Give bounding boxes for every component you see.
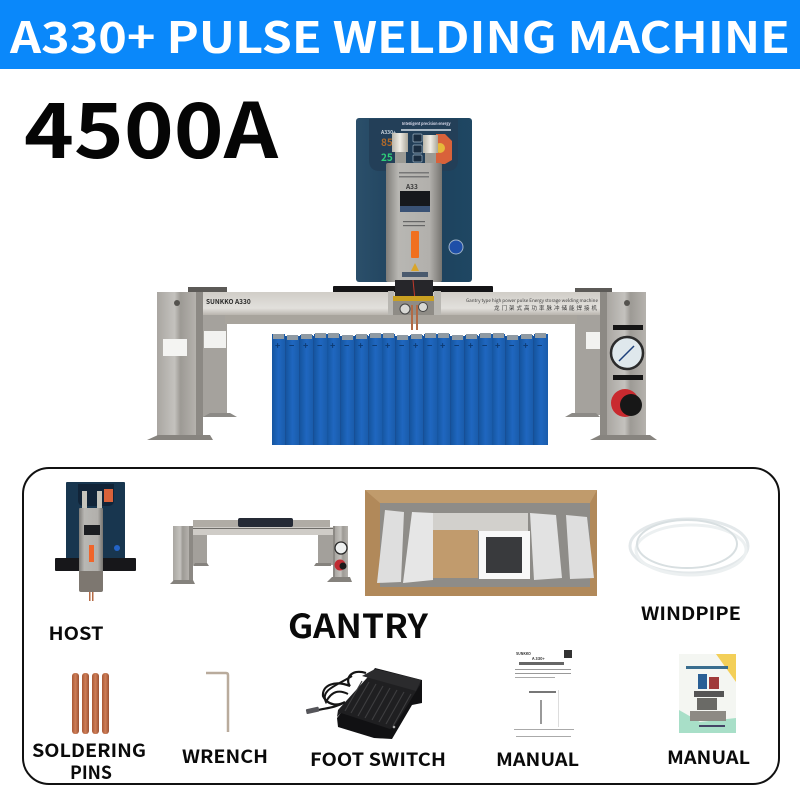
label: manual two: MANUAL <box>667 744 750 770</box>
battery pack: twenty blue cells: − <box>372 339 377 352</box>
label: host: HOST <box>48 620 104 646</box>
heading: current rating: 4500A <box>24 70 279 180</box>
label: wrench: WRENCH <box>182 743 268 769</box>
battery pack: twenty blue cells: + <box>303 339 308 352</box>
host unit <box>356 118 472 282</box>
host unit: A330+ <box>380 129 396 136</box>
gantry beam <box>197 292 607 324</box>
host unit: 85 <box>381 134 393 149</box>
battery pack: twenty blue cells: + <box>523 339 528 352</box>
battery pack: twenty blue cells <box>272 333 548 445</box>
label: soldering pins: SOLDERING <box>32 737 146 763</box>
battery pack: twenty blue cells: − <box>399 339 404 352</box>
back left leg <box>188 287 237 417</box>
battery pack: twenty blue cells: − <box>482 339 487 352</box>
main product photo: gantry welding machine <box>147 118 657 445</box>
battery pack: twenty blue cells: + <box>330 339 335 352</box>
item: foot switch <box>306 668 422 739</box>
battery pack: twenty blue cells: + <box>358 339 363 352</box>
front left leg <box>147 292 213 440</box>
item: manual sheet: SUNKKO <box>516 652 531 657</box>
battery pack: twenty blue cells: − <box>289 339 294 352</box>
item: host thumbnail <box>55 482 136 601</box>
mounting plate <box>333 286 493 294</box>
gantry beam: SUNKKO A330 <box>206 296 251 306</box>
label: soldering pins: PINS <box>70 759 112 785</box>
back right leg <box>565 288 612 417</box>
item: gantry packed in carton <box>365 490 597 596</box>
battery pack: twenty blue cells: − <box>509 339 514 352</box>
item: manual sheet <box>514 650 574 737</box>
host unit: 25 <box>381 149 393 164</box>
battery pack: twenty blue cells: + <box>385 339 390 352</box>
battery pack: twenty blue cells: + <box>468 339 473 352</box>
battery pack: twenty blue cells: + <box>275 339 280 352</box>
title banner: A330+ PULSE WELDING MACHINE <box>9 4 790 66</box>
battery pack: twenty blue cells: − <box>317 339 322 352</box>
battery pack: twenty blue cells: − <box>344 339 349 352</box>
item: soldering pins <box>72 673 109 734</box>
item: gantry thumbnail <box>170 518 352 584</box>
panel: package contents <box>23 468 779 785</box>
label: windpipe: WINDPIPE <box>641 600 741 626</box>
battery pack: twenty blue cells: − <box>427 339 432 352</box>
gantry beam: 龙门架式高功率脉冲储能焊接机 <box>494 304 597 312</box>
label: manual one: MANUAL <box>496 746 579 772</box>
front right leg with gauge and regulator <box>590 292 657 440</box>
item: windpipe coil <box>630 519 748 575</box>
label: foot switch: FOOT SWITCH <box>310 746 446 772</box>
item: wrench <box>206 673 228 732</box>
battery pack: twenty blue cells: + <box>413 339 418 352</box>
battery pack: twenty blue cells: + <box>495 339 500 352</box>
welding head <box>386 163 442 330</box>
item: manual booklet <box>679 654 736 733</box>
host unit: Intelligent precision energy <box>402 121 452 127</box>
gantry beam: Gantry type high power pulse Energy storage welding machine <box>466 297 598 304</box>
battery pack: twenty blue cells: − <box>537 339 542 352</box>
welding head: A33 <box>405 181 418 191</box>
battery pack: twenty blue cells: − <box>454 339 459 352</box>
item: manual sheet: A 330+ <box>531 656 545 662</box>
battery pack: twenty blue cells: + <box>440 339 445 352</box>
label: gantry: GANTRY <box>288 600 429 648</box>
